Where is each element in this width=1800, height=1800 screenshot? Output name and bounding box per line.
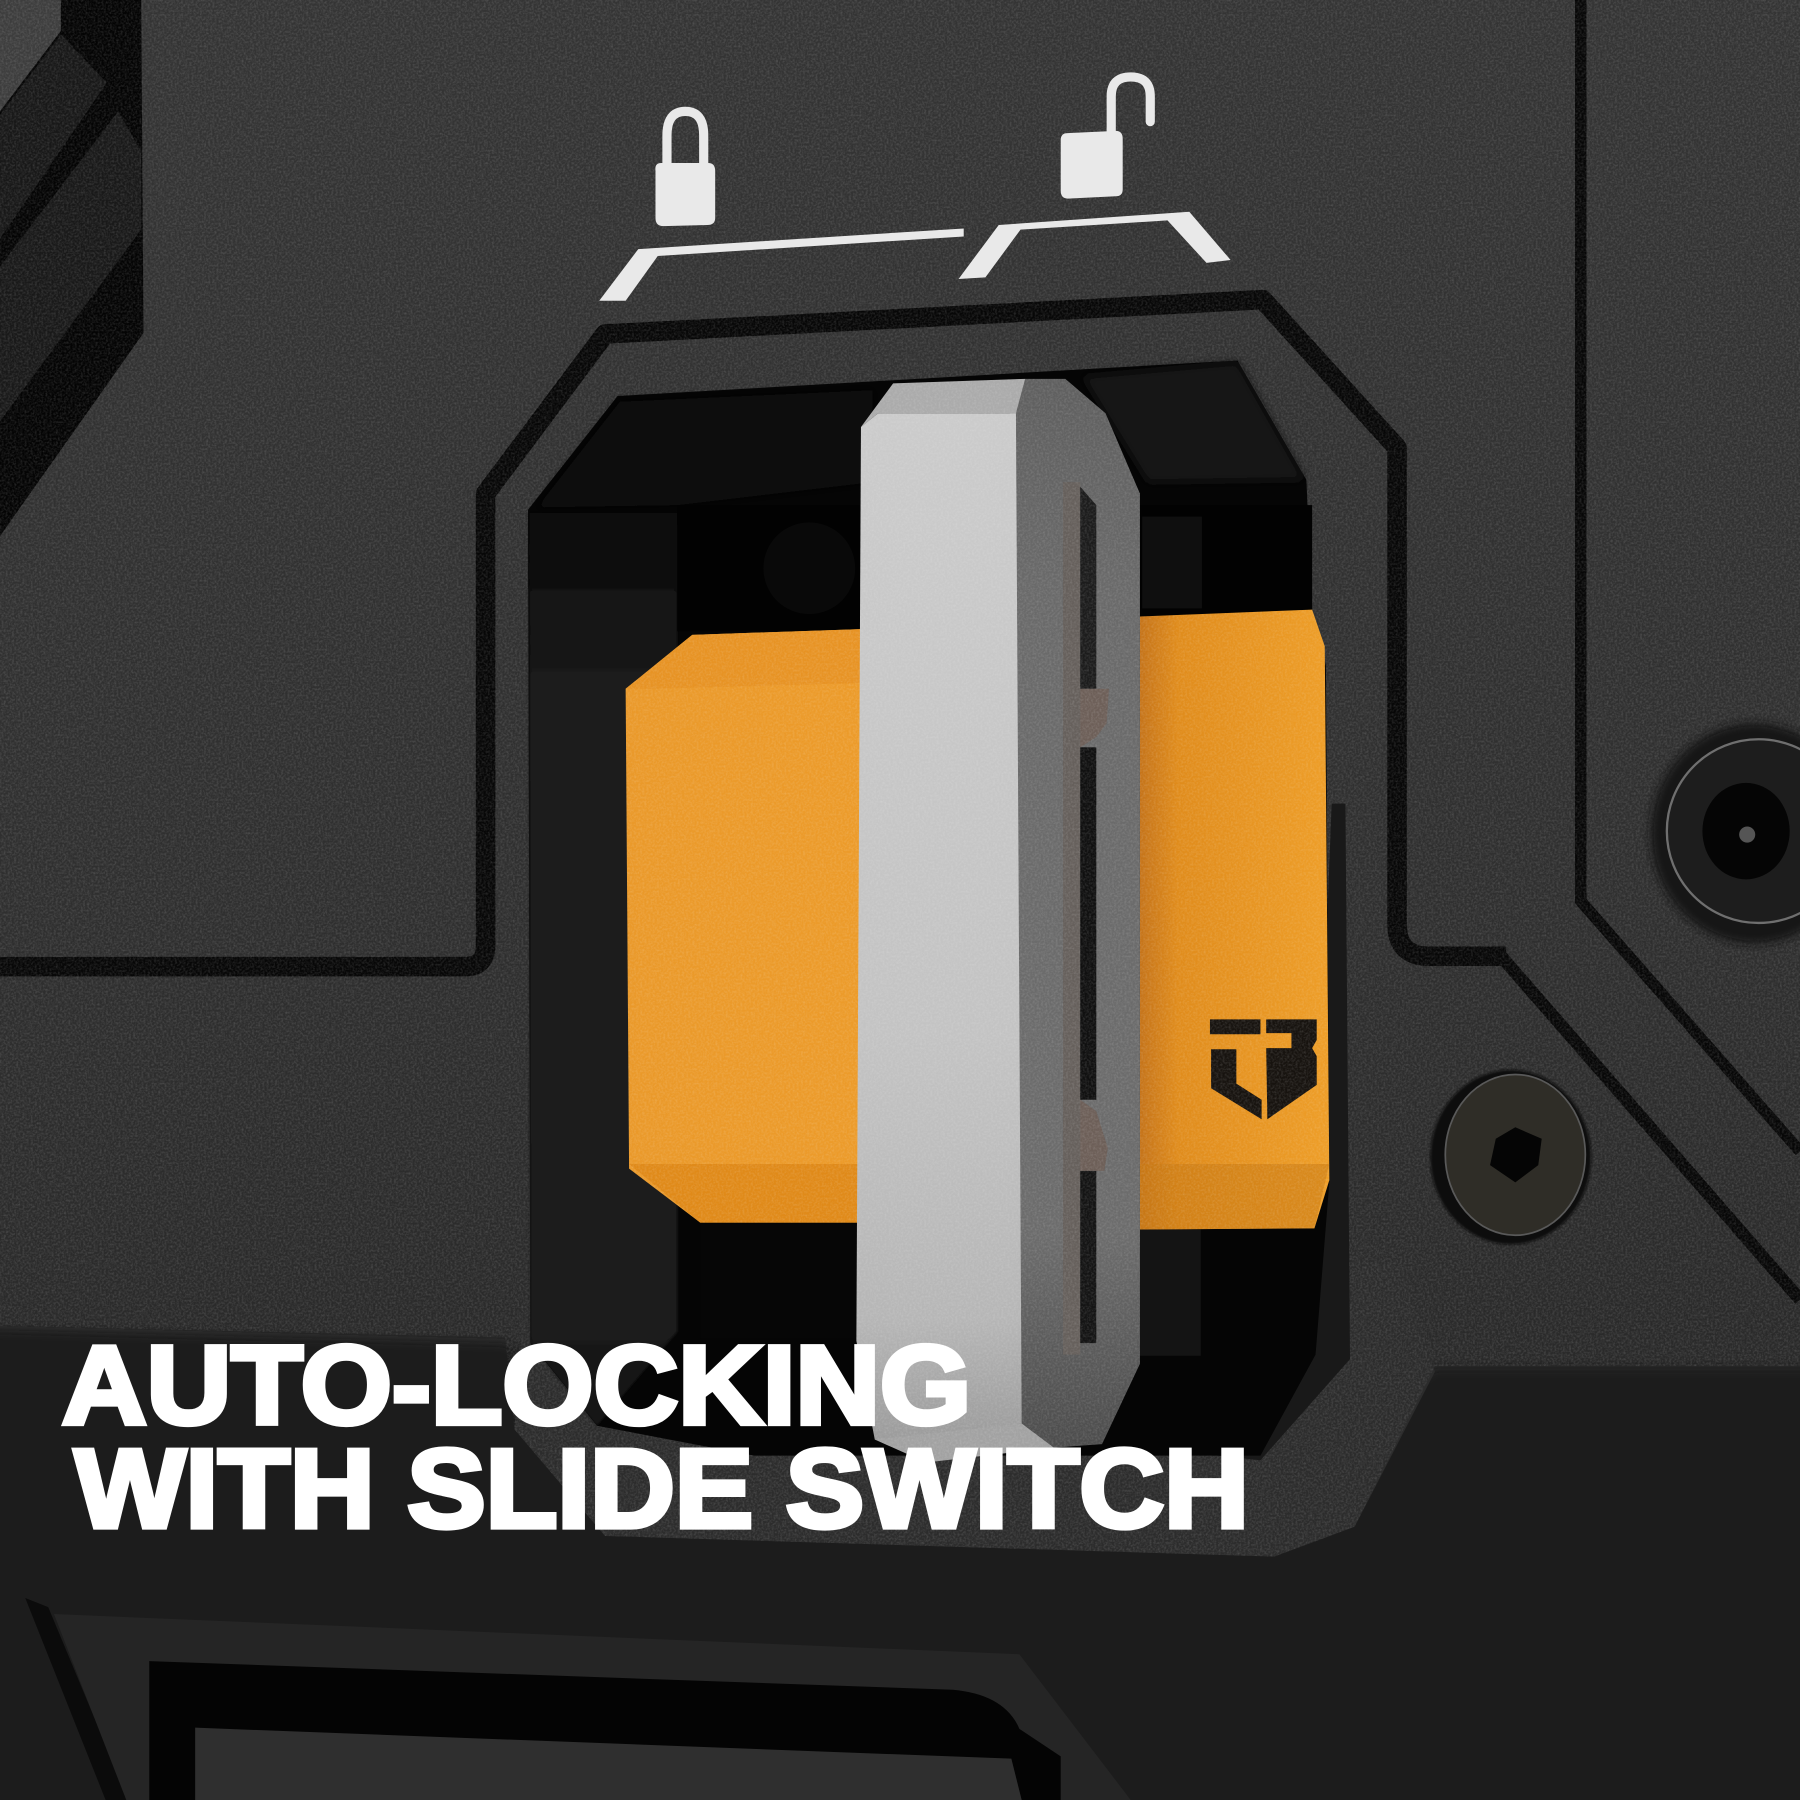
orange lock block right [1140,610,1329,1229]
title line two: WITH SLIDE SWITCH [75,1426,1249,1551]
top-left lower facet [0,111,141,421]
top-left inner facet [0,34,107,239]
vent opening [149,1661,1061,1800]
top-left panel corner [0,0,61,111]
inner mechanism [677,505,1312,631]
lower bezel of the switch frame [514,1263,1435,1557]
logo on orange block [1210,1019,1317,1119]
lock state marking [599,77,1231,301]
top-left recessed corner [0,0,143,536]
title [62,1322,1249,1551]
switch window opening [528,360,1329,1456]
shaded lower band [0,1329,1800,1800]
top chamfer [626,629,861,689]
screw in recess [763,522,855,614]
upper catch [1080,689,1109,747]
icon: closed padlock [655,111,715,226]
right large screw [1651,723,1800,944]
parts grain texture [626,379,1329,1458]
vent inner panel [195,1728,1022,1800]
mechanism lower block left [700,1224,861,1339]
lower catch [1080,1100,1108,1171]
locked position line [599,228,964,301]
orange lock block left [626,629,861,1223]
window inner wall [529,513,677,1426]
lower small screw [1430,1070,1591,1244]
upper slot [1080,487,1096,689]
window upper left recess [537,390,872,507]
vent black edge [25,1598,129,1800]
right panel groove [1581,0,1800,1151]
unlocked position bracket [959,212,1231,279]
icon: open padlock [1061,77,1150,199]
lower slot [1080,1171,1096,1343]
mechanism lower block right [1140,1229,1201,1356]
bottom chamfer [1140,1164,1329,1229]
mechanism tab [1142,517,1202,608]
side reflection strip [1063,482,1080,1355]
seam diagonal [1498,953,1800,1299]
bottom chamfer [875,1423,1054,1462]
panel seam around the switch [0,300,1506,967]
vent frame [54,1614,1131,1800]
slide switch [856,379,1140,1462]
switch window wall right [1217,804,1350,1460]
main slot [1080,747,1096,1100]
switch side face [1010,379,1140,1449]
bottom vent frame [25,1598,1131,1800]
window upper right recess [1083,363,1304,482]
top chamfer [861,379,1025,427]
switch front face [856,413,1022,1442]
title line one: AUTO-LOCKING [62,1322,971,1447]
bottom chamfer [629,1164,861,1223]
